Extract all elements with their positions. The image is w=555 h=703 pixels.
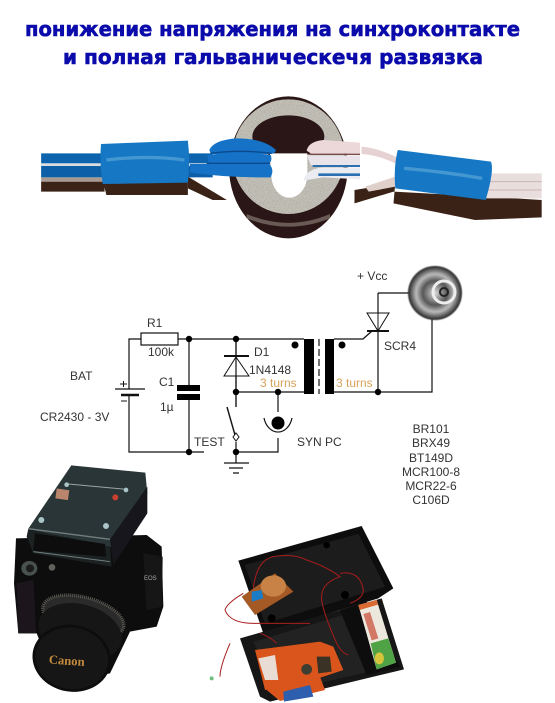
battery holder <box>340 602 400 675</box>
winding coils <box>190 138 360 181</box>
schematic labels: C1 <box>159 375 175 389</box>
lens: Canon <box>48 653 85 669</box>
sync PC socket <box>264 416 292 432</box>
box base <box>240 598 404 702</box>
schematic labels <box>40 269 416 449</box>
SCR part list <box>402 422 460 507</box>
green speck <box>210 676 214 680</box>
wiring <box>129 293 432 463</box>
ground symbol <box>224 463 249 473</box>
SCR part list: BT149D <box>409 451 453 465</box>
schematic labels: BAT <box>70 369 93 383</box>
diode D1 <box>224 339 249 407</box>
circuit schematic <box>40 266 462 507</box>
SCR <box>367 313 389 331</box>
box lid <box>238 526 393 633</box>
lens <box>27 587 129 698</box>
camera body <box>14 535 163 683</box>
SCR part list: BRX49 <box>412 436 450 450</box>
SCR part list: MCR100-8 <box>402 465 460 479</box>
wire shadows <box>41 177 542 220</box>
photo: camera with flash trigger <box>14 465 163 698</box>
schematic labels: 1N4148 <box>249 363 291 377</box>
SCR part list: BR101 <box>413 422 450 436</box>
schematic labels: + Vcc <box>357 269 387 283</box>
photo: toroid transformer with blue and white wires <box>41 96 542 238</box>
camera EOS mark: EOS <box>144 576 157 582</box>
schematic labels: SCR4 <box>384 339 416 353</box>
schematic labels: CR2430 - 3V <box>40 410 109 424</box>
schematic labels: 100k <box>148 345 175 359</box>
title: и полная гальваническечя развязка <box>63 45 483 69</box>
title <box>25 17 520 69</box>
transformer <box>292 339 346 394</box>
test switch <box>227 407 239 441</box>
flash trigger box <box>27 465 147 567</box>
title: понижение напряжения на синхроконтакте <box>25 17 520 41</box>
small PCB and coin <box>242 573 293 615</box>
battery symbol <box>115 381 145 401</box>
resistor R1 <box>141 333 178 345</box>
schematic labels: 1µ <box>160 400 174 414</box>
flash tube icon <box>408 266 462 320</box>
orange board <box>255 642 343 690</box>
photo: opened trigger box with battery and board <box>210 526 404 702</box>
schematic labels: R1 <box>147 316 163 330</box>
AA battery <box>358 600 396 669</box>
SCR part list: MCR22-6 <box>405 479 457 493</box>
wires and heat-shrink sleeves <box>41 141 542 200</box>
schematic labels: 3 turns <box>336 376 373 390</box>
schematic labels: SYN PC <box>297 435 342 449</box>
viewfinder <box>21 561 37 576</box>
red wires <box>220 556 363 677</box>
capacitor C1 <box>177 385 200 400</box>
schematic labels: D1 <box>254 345 270 359</box>
junction dots <box>186 336 381 455</box>
toroid core <box>229 96 348 238</box>
schematic labels: 3 turns <box>260 376 297 390</box>
schematic labels: TEST <box>194 435 225 449</box>
SCR part list: C106D <box>412 493 450 507</box>
